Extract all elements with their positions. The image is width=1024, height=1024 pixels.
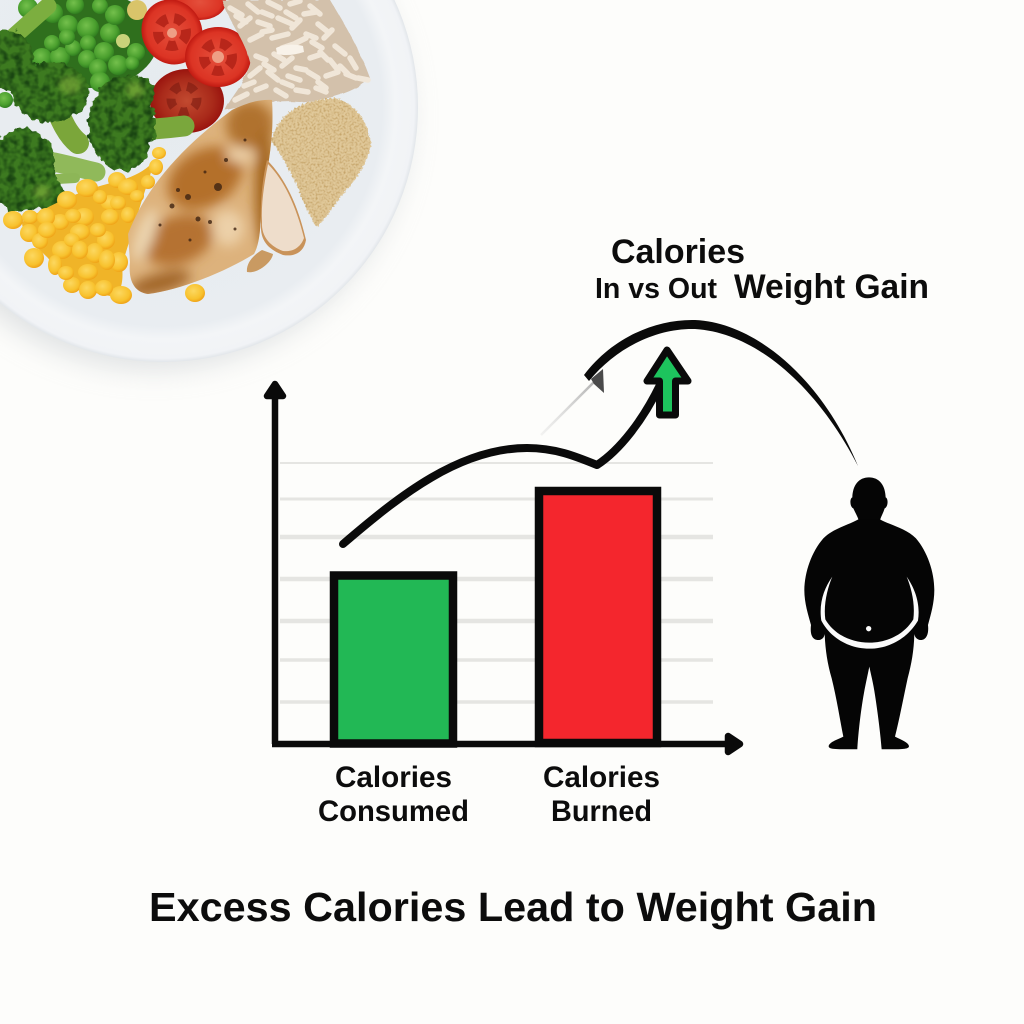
body [804,519,934,749]
bar label: Calories Burned [543,761,660,828]
green bar: calories consumed [334,576,453,744]
heading: Weight Gain: Weight Gain [734,268,929,306]
florets [0,30,155,212]
grid lines [280,463,713,702]
x axis with arrow [272,736,740,752]
plate of food [0,0,418,370]
grilled chicken breast [127,100,275,301]
red bar: calories burned [539,491,657,743]
waistline curve [821,577,919,649]
white plate [0,0,418,362]
bar label: Calories Consumed [318,761,469,828]
heading line: In vs Out: In vs Out [595,273,717,305]
title: Excess Calories Lead to Weight Gain [149,884,877,930]
peas [0,0,158,108]
heading: Calories In vs Out [595,233,745,305]
rising trend curve [343,385,660,544]
bar chart [267,384,740,752]
chicken slices [247,160,306,272]
icon: overweight person silhouette [804,477,934,749]
corn kernels [3,147,205,304]
bar label: Calories Consumed: Consumed [318,795,469,828]
bar label: Calories Burned: Burned [551,795,652,828]
green up arrow [647,350,688,415]
heading line: Calories: Calories [611,233,745,271]
light floret tips [33,76,144,199]
tomatoes [131,0,251,133]
stems [12,6,184,180]
bar label: Calories Burned: Calories [543,761,660,794]
brown rice [222,0,370,110]
head and neck [850,477,888,520]
y axis with arrow [267,384,283,744]
grey pointer arrow [541,369,604,435]
bar label: Calories Consumed: Calories [335,761,452,794]
broccoli [0,6,184,212]
arc toward person [584,320,858,466]
navel [866,626,871,631]
plate shadow [0,0,408,370]
quinoa [271,98,371,227]
